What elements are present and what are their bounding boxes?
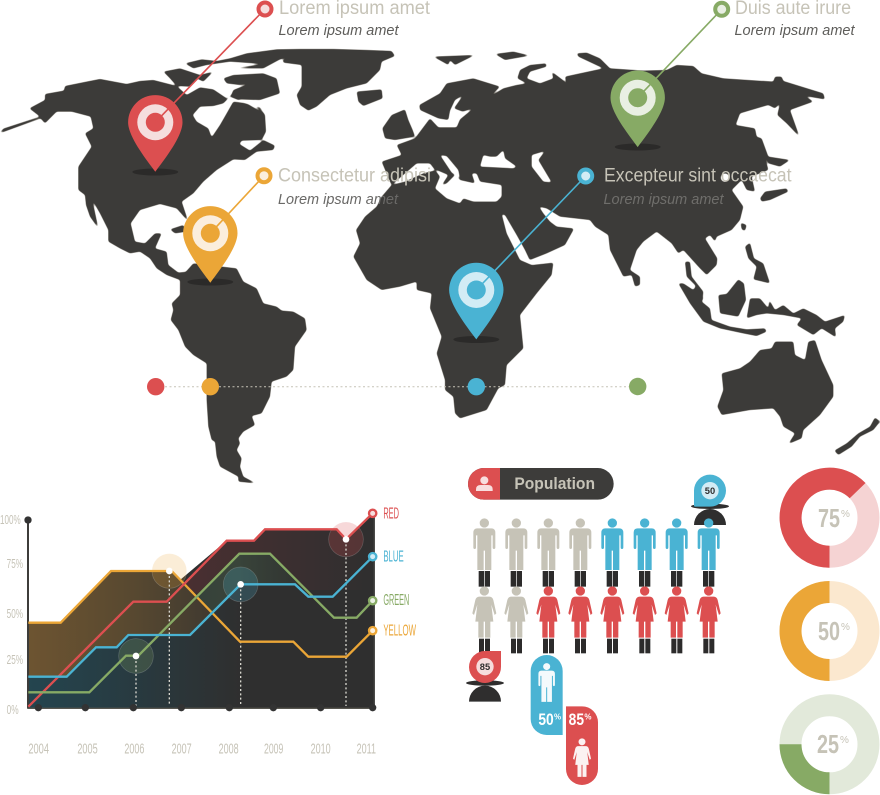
label: consectetur adipisi: Lorem ipsum amet bbox=[278, 191, 399, 208]
women row bbox=[472, 586, 721, 653]
chart: y axis labels: 0% bbox=[7, 702, 19, 717]
badge: 50 blue: 50 bbox=[705, 486, 715, 496]
map: north and central america bbox=[0, 79, 275, 280]
map: australia bbox=[717, 340, 833, 444]
dot: green bbox=[629, 378, 646, 395]
chart: highlight circles bbox=[119, 522, 363, 673]
map: greenland bbox=[185, 49, 395, 111]
donut: 25 percent: 25 bbox=[817, 729, 839, 759]
map: inland seas bbox=[193, 97, 729, 265]
dot: yellow bbox=[202, 378, 219, 395]
chart: y axis labels bbox=[0, 512, 23, 717]
label: excepteur sint occaecat bbox=[604, 166, 792, 208]
dot: red bbox=[147, 378, 164, 395]
chart: x axis years: 2006 bbox=[124, 741, 144, 757]
chart: legend: BLUE bbox=[383, 548, 404, 565]
chart: legend bbox=[383, 506, 416, 639]
badge: 85 red bbox=[466, 651, 504, 702]
line: yellow bbox=[28, 571, 373, 657]
chart: x axis years: 2011 bbox=[357, 741, 376, 757]
map: southeast asia and indonesia bbox=[678, 243, 845, 337]
donut: 50 percent: 50 bbox=[818, 616, 840, 646]
label: consectetur adipisi bbox=[278, 166, 431, 208]
map: kamchatka strip and japan bbox=[741, 137, 790, 231]
chart: x axis years: 2009 bbox=[264, 741, 283, 757]
chart: white markers bbox=[133, 536, 349, 659]
chart: red tint bbox=[182, 513, 374, 594]
tab: men 50 percent: 50 bbox=[538, 710, 554, 729]
chart: end rings bbox=[369, 510, 376, 634]
donut: 25 percent bbox=[790, 705, 868, 783]
map: iceland bbox=[357, 89, 383, 106]
dot: blue bbox=[468, 378, 485, 395]
map: eurasia and africa bbox=[353, 53, 825, 418]
tab: men 50 percent: % bbox=[554, 712, 561, 721]
label: lorem ipsum amet bbox=[278, 0, 431, 39]
chart: y axis labels: 75% bbox=[7, 556, 23, 571]
donut: 50 percent bbox=[790, 592, 868, 670]
chart: x axis years: 2008 bbox=[219, 741, 239, 757]
chart: y axis labels: 25% bbox=[7, 652, 23, 667]
chart: legend: YELLOW bbox=[383, 622, 416, 639]
line: red bbox=[28, 513, 373, 707]
location dots timeline bbox=[147, 378, 646, 395]
donut: 75 percent: 75 bbox=[818, 503, 840, 533]
chart: y axis labels: 50% bbox=[7, 606, 23, 621]
donut: 50 percent: % bbox=[841, 622, 850, 633]
map: uk bbox=[382, 109, 415, 140]
map: caribbean island bbox=[170, 225, 187, 233]
men row bbox=[473, 518, 720, 587]
badge: 85 red: 85 bbox=[480, 662, 490, 672]
map: south america bbox=[171, 263, 307, 483]
badge: 50 blue bbox=[691, 475, 729, 525]
pin: yellow central america bbox=[183, 169, 270, 286]
label: lorem ipsum amet: Lorem ipsum amet bbox=[278, 22, 399, 39]
chart: x axis years: 2005 bbox=[77, 741, 98, 757]
population header bbox=[468, 468, 614, 500]
chart: green tint bbox=[158, 554, 301, 635]
line chart bbox=[0, 506, 416, 757]
map: new zealand bbox=[834, 417, 880, 455]
donut: 75 percent: % bbox=[841, 509, 850, 520]
label: consectetur adipisi: Consectetur adipisi bbox=[278, 166, 431, 187]
population panel bbox=[466, 468, 729, 785]
chart: x axis years: 2007 bbox=[172, 741, 192, 757]
donut: 25 percent: % bbox=[840, 735, 849, 746]
population header: Population bbox=[514, 474, 595, 493]
chart: axes bbox=[24, 515, 375, 708]
chart: x axis years bbox=[28, 741, 376, 757]
pin: green asia bbox=[610, 3, 728, 150]
chart: blue tint bbox=[28, 584, 241, 708]
chart: x axis years: 2004 bbox=[28, 741, 49, 757]
label: excepteur sint occaecat: Excepteur sint occaecat bbox=[604, 166, 792, 187]
world map bbox=[0, 0, 880, 500]
chart: yellow tint bbox=[28, 571, 213, 677]
tab: women 85 percent: % bbox=[584, 712, 591, 721]
line: blue bbox=[28, 557, 373, 677]
map: arctic islands bbox=[163, 68, 280, 100]
tab: women 85 percent: 85 bbox=[569, 710, 584, 729]
label: duis aute irure: Lorem ipsum amet bbox=[734, 22, 855, 39]
donut: 75 percent bbox=[790, 479, 868, 557]
label: excepteur sint occaecat: Lorem ipsum amet bbox=[604, 191, 724, 208]
chart: x axis dots bbox=[35, 704, 376, 711]
line: green bbox=[28, 554, 373, 692]
chart: dark area bbox=[28, 513, 374, 708]
pin: red north america bbox=[128, 2, 272, 176]
map: russian arctic islands bbox=[433, 52, 530, 65]
tab: men 50 percent bbox=[531, 655, 563, 735]
pin: blue africa bbox=[449, 170, 592, 343]
chart: dotted drop lines bbox=[136, 540, 346, 706]
chart: legend: GREEN bbox=[383, 592, 409, 609]
chart: x axis years: 2010 bbox=[311, 741, 331, 757]
chart: y axis labels: 100% bbox=[0, 512, 21, 527]
label: duis aute irure bbox=[734, 0, 855, 39]
chart: legend: RED bbox=[383, 506, 399, 523]
tab: women 85 percent bbox=[566, 706, 598, 785]
